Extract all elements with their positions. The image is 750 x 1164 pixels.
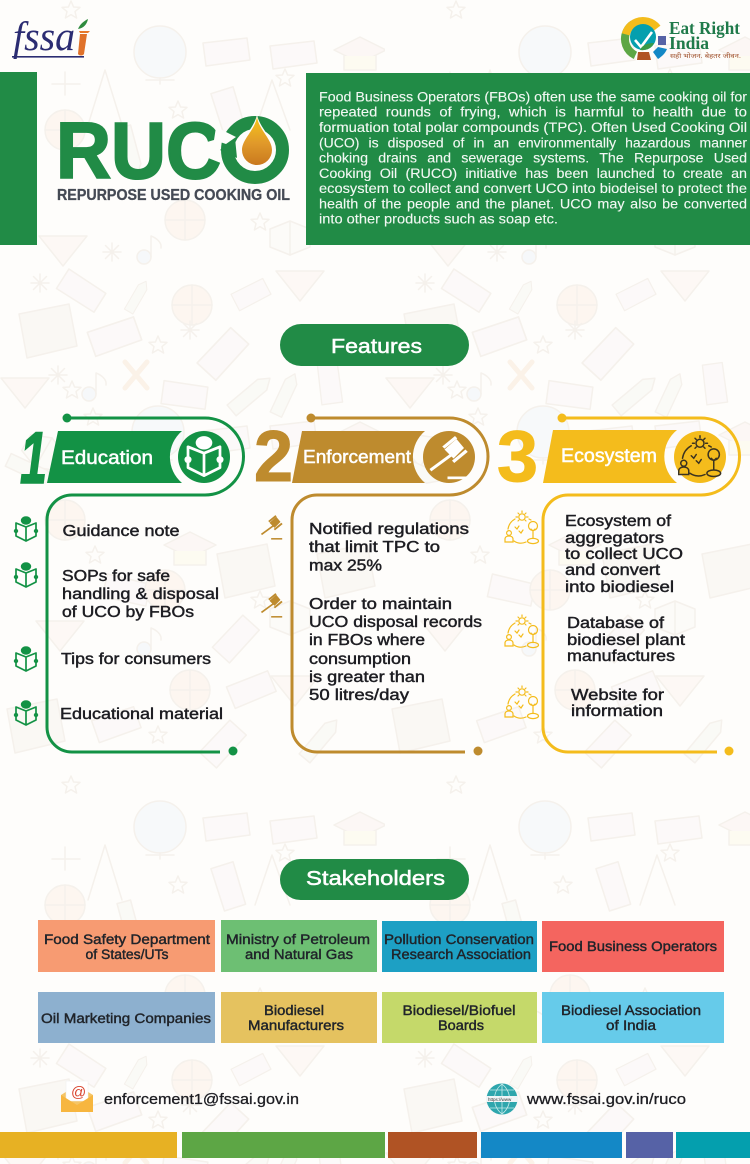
panel: Enforcement: in FBOs where xyxy=(309,632,425,649)
logo: Eat Right India: Eat Right xyxy=(669,18,740,38)
stakeholders grid: Biodiesel/Biofuel xyxy=(402,1003,516,1018)
panel: Enforcement: Notified regulations xyxy=(309,521,469,538)
panel: Enforcement: Order to maintain xyxy=(309,596,452,613)
panel: Enforcement: is greater than xyxy=(309,669,425,686)
heading: Stakeholders xyxy=(280,859,469,900)
panel: Education: Tips for consumers xyxy=(61,651,211,668)
RUCO logo: REPURPOSE USED COOKING OIL xyxy=(57,187,290,204)
contact: email: enforcement1@fssai.gov.in xyxy=(104,1091,299,1108)
stakeholders grid: Food Safety Department xyxy=(44,932,210,947)
heading: Features: Features xyxy=(331,335,422,358)
left green band xyxy=(0,72,37,245)
stakeholders grid xyxy=(38,920,724,1043)
panel: Ecosystem: biodiesel plant xyxy=(567,632,686,649)
stakeholders grid: Oil Marketing Companies xyxy=(41,1011,211,1026)
panel: Education: SOPs for safe xyxy=(62,568,170,585)
panel: introduction: into other products such as soap etc. xyxy=(319,212,558,226)
panel: Enforcement: that limit TPC to xyxy=(309,539,440,556)
contact: website: https://www xyxy=(488,1097,512,1102)
panel: introduction: Food Business Operators (FBOs) often use the same cooking oil for xyxy=(319,90,748,104)
panel: Ecosystem: Ecosystem xyxy=(561,446,657,467)
panel: introduction xyxy=(306,73,750,245)
footer colour bar xyxy=(0,1132,750,1158)
panel: Education: 1 xyxy=(20,418,47,499)
panel: Ecosystem: into biodiesel xyxy=(565,579,674,596)
panel: Ecosystem: and convert xyxy=(565,562,661,579)
panel: Ecosystem: information xyxy=(571,703,663,720)
logo: fssai: fssa xyxy=(13,13,75,59)
stakeholders grid: and Natural Gas xyxy=(245,947,353,962)
panel: Education: Education xyxy=(61,447,153,469)
panel: Ecosystem: Database of xyxy=(567,615,665,632)
panel: introduction: health of the people and the planet. UCO may also be converted xyxy=(319,196,747,212)
panel: Education: of UCO by FBOs xyxy=(62,604,194,621)
panel: Enforcement: UCO disposal records xyxy=(309,614,482,631)
contact: website xyxy=(486,1084,686,1114)
panel: Enforcement: 2 xyxy=(254,417,293,497)
panel: Education: handling & disposal xyxy=(62,586,219,603)
panel: Education: Guidance note xyxy=(62,523,180,540)
panel: Enforcement xyxy=(254,414,488,756)
stakeholders grid: Manufacturers xyxy=(248,1018,344,1033)
panel: introduction: repeated rounds of frying, which is harmful to health due to xyxy=(319,104,747,120)
panel: Ecosystem: aggregators xyxy=(565,530,664,547)
logo: Eat Right India: सही भोजन. बेहतर जीवन. xyxy=(670,52,741,60)
panel: introduction: choking drains and sewerage systems. The Repurpose Used xyxy=(319,150,747,166)
contact: email: @ xyxy=(71,1084,86,1101)
heading: Stakeholders: Stakeholders xyxy=(306,867,445,890)
panel: introduction: (UCO) is disposed of in an environmentally hazardous manner xyxy=(319,136,748,150)
contact: email xyxy=(61,1081,299,1112)
stakeholders grid: Pollution Conservation xyxy=(384,932,534,947)
panel: Ecosystem: 3 xyxy=(497,417,538,497)
logo: Eat Right India xyxy=(619,15,741,63)
contact: website: www.fssai.gov.in/ruco xyxy=(526,1091,686,1108)
panel: Enforcement: Enforcement xyxy=(303,446,411,467)
panel: Education: Educational material xyxy=(60,706,223,723)
panel: Enforcement: 50 litres/day xyxy=(309,687,409,704)
stakeholders grid: Food Business Operators xyxy=(549,939,717,954)
panel: Ecosystem: to collect UCO xyxy=(565,546,683,563)
stakeholders grid: of States/UTs xyxy=(86,947,169,962)
stakeholders grid: Ministry of Petroleum xyxy=(226,932,370,947)
RUCO logo: RUC xyxy=(56,106,221,195)
stakeholders grid: Biodiesel Association xyxy=(561,1003,701,1018)
stakeholders grid: Biodiesel xyxy=(264,1003,324,1018)
panel: Education xyxy=(14,414,243,756)
stakeholders grid: Boards xyxy=(438,1018,484,1033)
panel: introduction: ecosystem to collect and convert UCO into biodeisel to protect the xyxy=(319,181,747,196)
logo: Eat Right India: India xyxy=(669,33,709,53)
panel: Enforcement: max 25% xyxy=(309,558,382,574)
panel: Enforcement: consumption xyxy=(309,651,411,668)
panel: introduction: formuation total polar compounds (TPC). Often Used Cooking Oil xyxy=(319,120,747,135)
panel: Ecosystem: manufactures xyxy=(567,648,675,665)
stakeholders grid: Research Association xyxy=(391,947,531,962)
panel: Ecosystem: Website for xyxy=(571,687,664,704)
stakeholders grid: of India xyxy=(606,1018,657,1033)
panel: Ecosystem: Ecosystem of xyxy=(565,513,672,530)
panel: introduction: Cooking Oil (RUCO) initiative has been launched to create an xyxy=(319,166,747,181)
heading: Features xyxy=(280,324,469,366)
panel: Ecosystem xyxy=(497,414,740,756)
RUCO logo xyxy=(56,106,290,204)
